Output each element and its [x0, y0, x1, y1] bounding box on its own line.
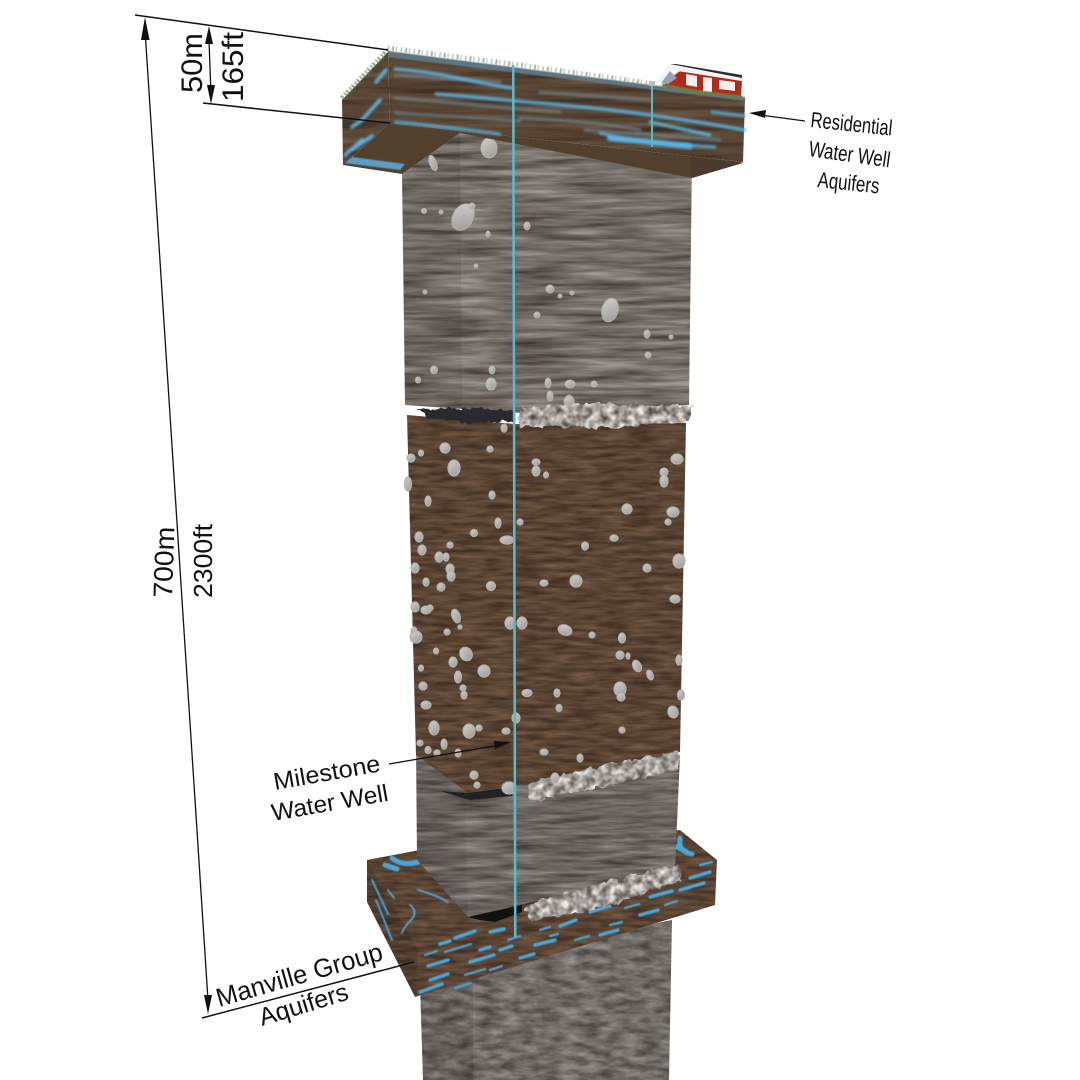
- soil column: lower grey block: [416, 745, 680, 922]
- gravel band: lower: [525, 864, 682, 922]
- label: Residential Water Well Aquifers: Water Well: [807, 136, 892, 172]
- label: Residential Water Well Aquifers: Aquifers: [816, 167, 881, 198]
- label: Milestone Water Well: Milestone: [271, 751, 382, 796]
- residential well pipe: [649, 81, 655, 147]
- Milestone water well pipe: [512, 65, 516, 937]
- blue-grey top edge strip: [388, 51, 745, 101]
- gravel band: middle: [526, 751, 680, 802]
- label: 2300ft: 2300ft: [188, 523, 218, 598]
- label: 700m: 700m: [148, 526, 180, 598]
- aquifer veins: residential: [345, 69, 745, 155]
- dark coal layer: [417, 408, 515, 423]
- label: Manville Group Aquifers: Manville Group: [212, 937, 386, 1013]
- label: 50m: 50m: [176, 33, 209, 93]
- soil column: upper grey block: [402, 133, 692, 413]
- label: Residential Water Well Aquifers: Residential: [809, 107, 894, 141]
- dimension line: base of shallow aquifers: [203, 103, 390, 123]
- arrow: 700m total depth: [141, 17, 212, 1014]
- arrow: Residential label: [749, 110, 805, 121]
- arrow: Milestone label: [389, 741, 511, 764]
- soil column: brown gravel-rich block: [407, 415, 686, 800]
- label: Manville Group Aquifers: Aquifers: [256, 978, 352, 1032]
- label: Milestone Water Well: Water Well: [269, 780, 390, 827]
- panel: residential aquifer top slab: [342, 51, 745, 178]
- label: Milestone Water Well: [269, 751, 390, 827]
- grass along the top edge: [342, 48, 655, 98]
- soil column: bottom grey block: [420, 920, 672, 1080]
- icon: red house: [655, 64, 744, 97]
- dimension line: Manville aquifers: [202, 962, 414, 1018]
- aquifer veins: Manville: [372, 838, 712, 992]
- rocks in the brown block: [404, 424, 685, 794]
- rocks in the upper grey block: [416, 138, 673, 406]
- gravel band: upper: [518, 403, 692, 428]
- label: Residential Water Well Aquifers: [807, 107, 894, 198]
- panel: Manville Group aquifer slab: [367, 830, 717, 997]
- dimension line: top of ground: [135, 15, 388, 50]
- soft grey-blue seams: residential: [395, 75, 720, 140]
- arrow: 50m shallow depth: [205, 26, 215, 104]
- label: 165ft: 165ft: [217, 31, 250, 102]
